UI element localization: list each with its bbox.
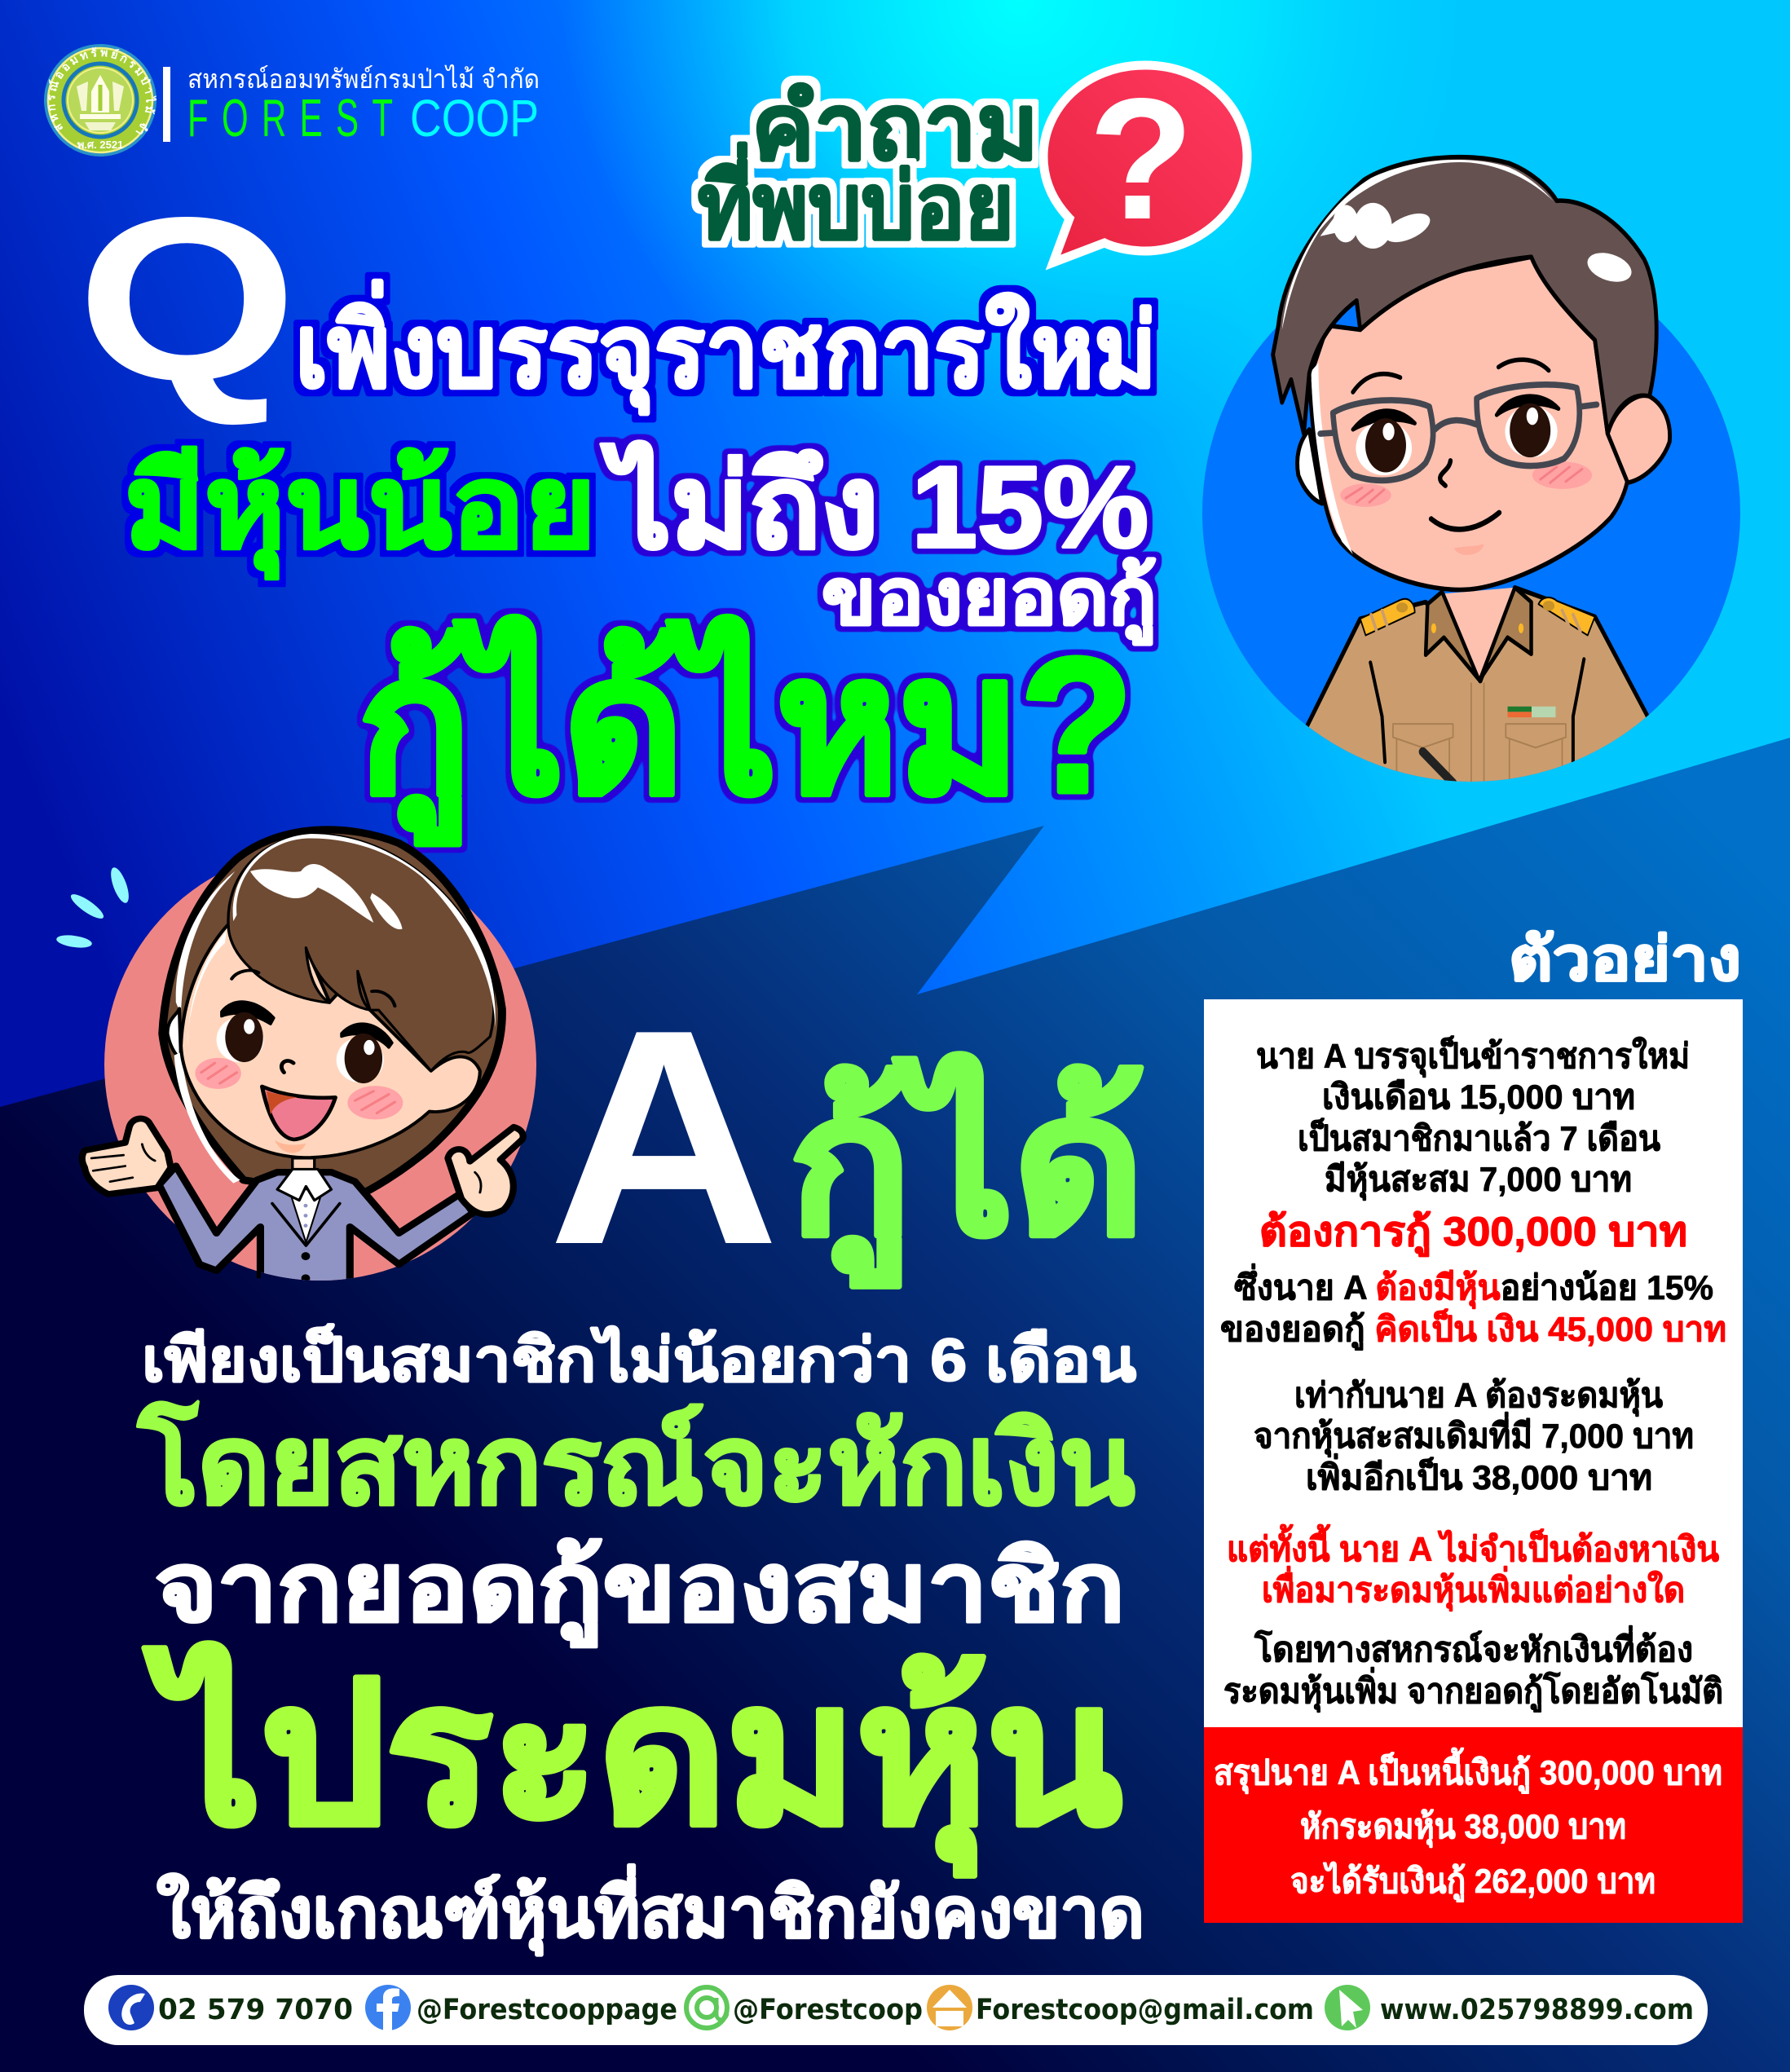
letter Q: Q [77, 170, 298, 429]
question line 3: ของยอดกู้ [822, 554, 1157, 646]
icon: web cursor [1325, 1985, 1370, 2030]
example: no cash needed note [1227, 1523, 1719, 1611]
example: member details [1256, 1035, 1690, 1201]
man background circle [1202, 244, 1740, 782]
answer line 4: ไประดมหุ้น [144, 1642, 1122, 1876]
answer line 1: เพียงเป็นสมาชิกไม่น้อยกว่า 6 เดือน [142, 1325, 1136, 1394]
icon: facebook [365, 1985, 411, 2030]
example: share requirement [1220, 1263, 1726, 1351]
example heading: ตัวอย่าง [1509, 925, 1741, 993]
answer line 2: โดยสหกรณ์จะหักเงิน [137, 1401, 1135, 1527]
example: shares to add: เพิ่มอีกเป็น 38,000 บาท [1306, 1453, 1652, 1497]
example: share requirement: ซึ่งนาย A ต้องมีหุ้นอย่างน้อย 15% [1234, 1263, 1713, 1309]
logo divider bar [163, 67, 170, 142]
question line 2 highlight: มีหุ้นน้อย [125, 443, 596, 580]
icon: question speech bubble [1043, 62, 1247, 262]
logo: cooperative seal [44, 44, 157, 157]
example: member details: มีหุ้นสะสม 7,000 บาท [1325, 1160, 1632, 1201]
example: no cash needed note: แต่ทั้งนี้ นาย A ไม่จำเป็นต้องหาเงิน [1227, 1523, 1719, 1568]
example: share requirement: ของยอดกู้ คิดเป็น เงิน 45,000 บาท [1220, 1308, 1726, 1351]
website: www.025798899.com [1380, 1994, 1694, 2026]
brand: COOP: COOP [410, 89, 539, 148]
example: member details: เงินเดือน 15,000 บาท [1322, 1078, 1635, 1116]
example: automatic deduction [1223, 1625, 1723, 1713]
icon: phone [108, 1985, 154, 2030]
answer line 3: จากยอดกู้ของสมาชิก [155, 1534, 1125, 1647]
panel: worked example [1204, 999, 1743, 1727]
answer line 5: ให้ถึงเกณฑ์หุ้นที่สมาชิกยังคงขาด [157, 1864, 1144, 1956]
facebook handle: @Forestcooppage [417, 1994, 677, 2026]
example: shares to add: จากหุ้นสะสมเดิมที่มี 7,000 บาท [1254, 1412, 1694, 1457]
logo: cooperative seal: พ.ศ. 2521 [77, 139, 123, 151]
icon: line at-sign [686, 1987, 727, 2028]
line handle: @Forestcoop [733, 1994, 923, 2026]
panel: summary [1204, 1727, 1743, 1923]
panel: summary: หักระดมหุ้น 38,000 บาท [1300, 1807, 1626, 1848]
heading: ที่พบบ่อย: ที่พบบ่อย [698, 142, 1014, 258]
example: shares to add [1254, 1376, 1694, 1497]
background: lower speech panel with tail [0, 738, 1790, 2072]
panel: summary: จะได้รับเงินกู้ 262,000 บาท [1290, 1861, 1656, 1902]
example: member details: นาย A บรรจุเป็นข้าราชการใหม่ [1256, 1035, 1690, 1078]
question line 1: เพิ่งบรรจุราชการใหม่ [295, 280, 1157, 415]
heading: คำถาม: คำถาม [752, 77, 1038, 179]
example: automatic deduction: ระดมหุ้นเพิ่ม จากยอดกู้โดยอัตโนมัติ [1223, 1667, 1723, 1713]
answer: กู้ได้: กู้ได้ [789, 1053, 1144, 1287]
email: Forestcoop@gmail.com [976, 1994, 1314, 2026]
example: member details: เป็นสมาชิกมาแล้ว 7 เดือน [1298, 1118, 1660, 1157]
organisation name: สหกรณ์ออมทรัพย์กรมป่าไม้ จำกัด [187, 64, 540, 94]
woman background circle [104, 849, 536, 1281]
panel: summary: สรุปนาย A เป็นหนี้เงินกู้ 300,000 บาท [1214, 1747, 1722, 1794]
icon: question speech bubble: ? [1088, 62, 1194, 255]
icon: home mail [927, 1985, 972, 2030]
illustration: man in uniform [1202, 157, 1740, 812]
phone number: 02 579 7070 [158, 1994, 353, 2026]
question line 2: ไม่ถึง 15% [601, 441, 1149, 572]
brand: FOREST: FOREST [187, 89, 393, 148]
letter A: A [548, 966, 780, 1308]
example: no cash needed note: เพื่อมาระดมหุ้นเพิ่มแต่อย่างใด [1262, 1566, 1685, 1611]
footer contact bar [84, 1975, 1708, 2045]
illustration: woman in suit [82, 830, 536, 1289]
example: loan wanted: ต้องการกู้ 300,000 บาท [1259, 1209, 1687, 1257]
example: automatic deduction: โดยทางสหกรณ์จะหักเงินที่ต้อง [1254, 1625, 1693, 1669]
question line 4: กู้ได้ไหม? [359, 616, 1133, 845]
example: shares to add: เท่ากับนาย A ต้องระดมหุ้น [1294, 1376, 1663, 1417]
icon: cyan emphasis marks [55, 866, 132, 950]
